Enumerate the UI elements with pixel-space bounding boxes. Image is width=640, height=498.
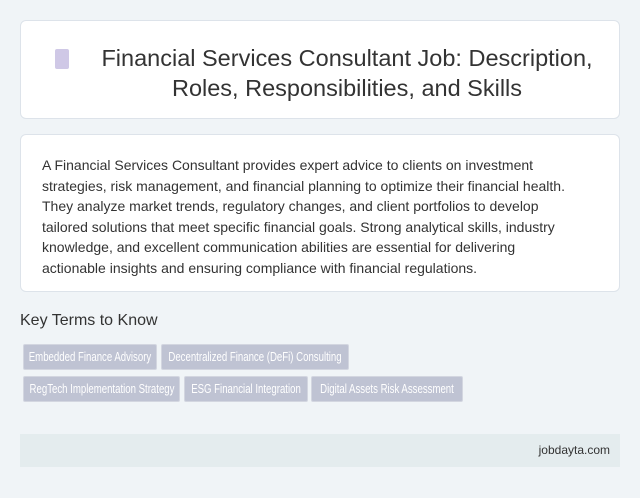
tag 1: Embedded Finance Advisory [29,349,151,364]
tag 3: RegTech Implementation Strategy [29,381,174,396]
title: Financial Services Consultant Job: Description, Roles, Responsibilities, and Skills [101,45,593,101]
title card [20,20,620,119]
description card [20,134,620,292]
tag 5 [311,376,463,402]
description text: A Financial Services Consultant provides expert advice to clients on investment strategies, risk management, and financial planning to optimize their financial health. They analyze market trends, regulatory changes, and client portfolios to develop tailored solutions that meet specific financial goals. Strong analytical skills, industry knowledge, and excellent communication abilities are essential for delivering actionable insights and ensuring compliance with financial regulations. [42,157,565,276]
tag 4 [184,376,308,402]
footer source: jobdayta.com [539,443,610,457]
tag 2: Decentralized Finance (DeFi) Consulting [168,349,342,364]
heading: key terms: Key Terms to Know [20,312,158,329]
tag 4: ESG Financial Integration [191,381,301,396]
tag 5: Digital Assets Risk Assessment [320,381,454,396]
footer [20,434,620,467]
tag 2 [161,344,349,370]
tag 3 [23,376,180,402]
icon: document [55,49,69,69]
tag 1 [23,344,157,370]
